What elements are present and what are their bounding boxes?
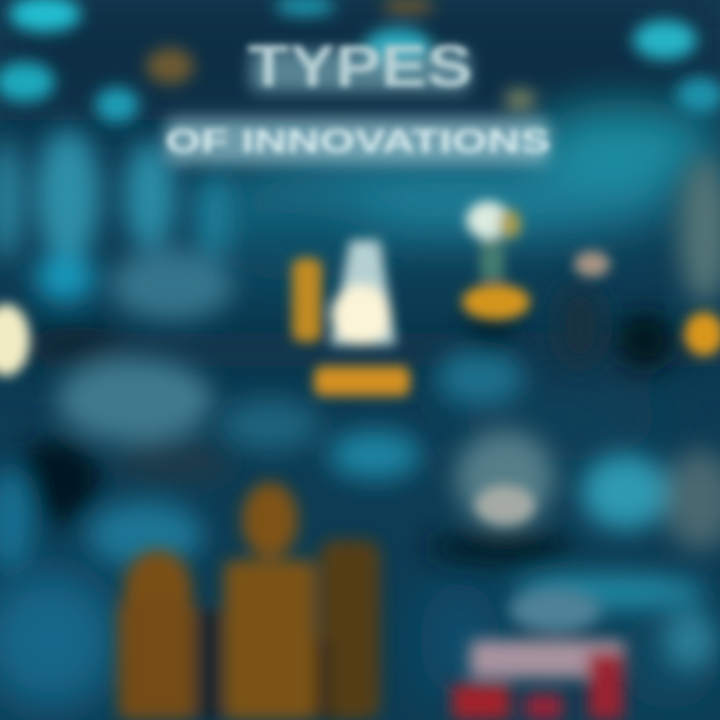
right flask icon bbox=[462, 201, 720, 356]
title text: TYPES bbox=[248, 34, 472, 99]
brown figures bbox=[118, 482, 380, 720]
top glowing lights bbox=[0, 0, 720, 123]
title text bbox=[166, 34, 550, 159]
grey dial icon bbox=[475, 485, 535, 525]
left column panels bbox=[0, 129, 235, 572]
red and white chart bbox=[452, 588, 625, 720]
centre and right mid panels bbox=[220, 156, 720, 670]
title text: OF INNOVATIONS bbox=[166, 123, 550, 159]
central lamp icon bbox=[292, 240, 410, 396]
title glow bbox=[165, 50, 550, 164]
left glowing orb bbox=[0, 304, 30, 376]
